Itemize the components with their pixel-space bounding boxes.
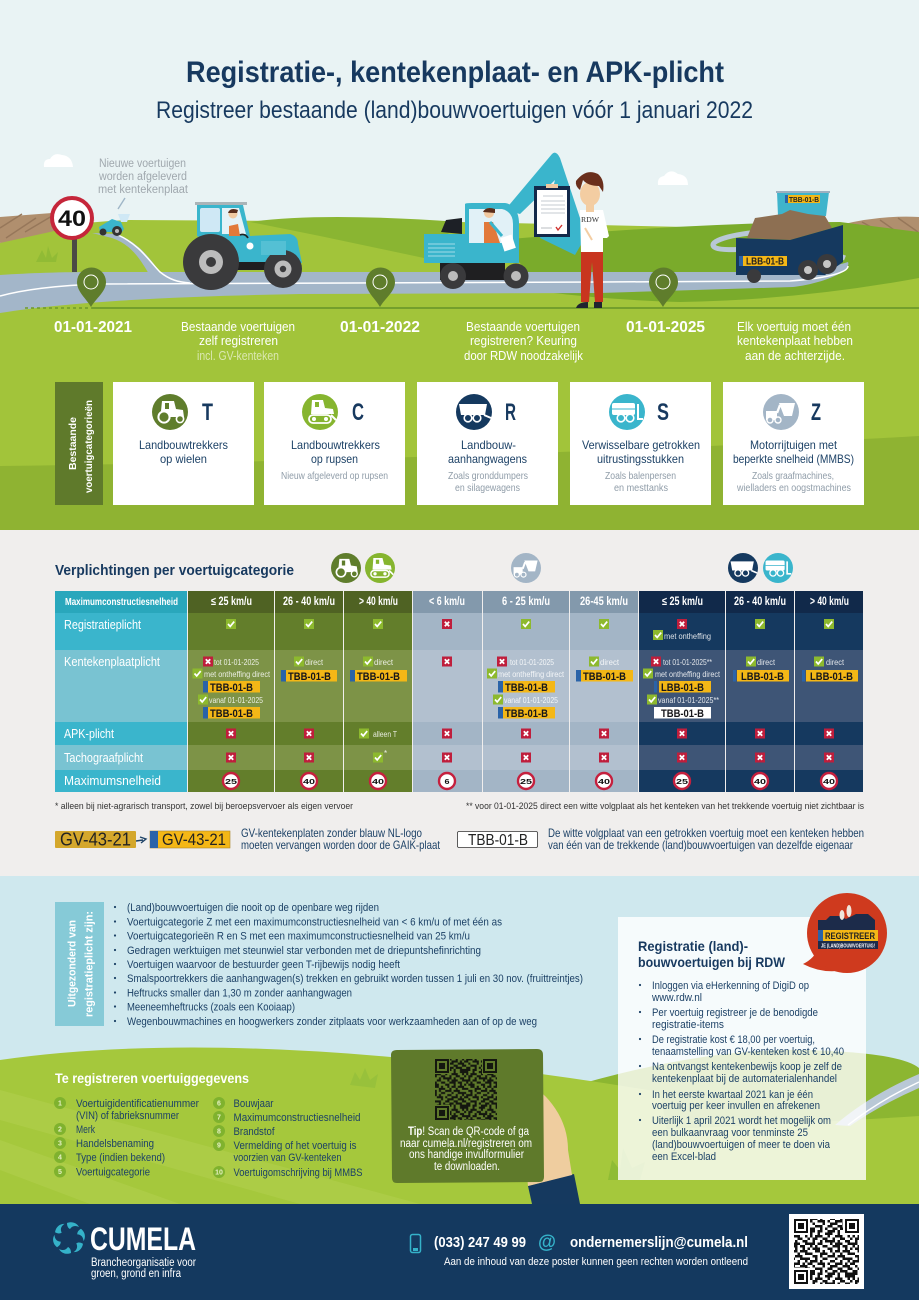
- list: RDW steps: In het eerste kwartaal 2021 kan je één: [652, 1089, 813, 1101]
- panel: category R: R: [505, 399, 516, 426]
- note new vehicles: met kentekenplaat: [98, 184, 189, 196]
- panel: category C: [264, 382, 405, 505]
- panel: category Z: beperkte snelheid (MMBS): [733, 452, 854, 466]
- panel: category Z: [723, 382, 864, 505]
- table: column Z 6-25 km/u: 6 - 25 km/u: [502, 596, 550, 608]
- table: column T/C 26-40 km/u: TBB-01-B: [288, 671, 331, 683]
- panel: exempted label: Uitgezonderd van: [66, 920, 78, 1007]
- text: white plate: [548, 826, 864, 852]
- table: column R/S 26-40 km/u: direct: [757, 658, 776, 667]
- footnote right: ** voor 01-01-2025 direct een witte volgplaat als het kenteken van het trekkende voertuig niet zichtbaar is: [466, 801, 864, 812]
- pin 2021: [77, 268, 106, 307]
- timeline line: [25, 307, 919, 309]
- table: column R/S up to 25 km/u: 25: [676, 777, 688, 786]
- text: GV plates: moeten vervangen worden door de GAIK-plaat: [241, 838, 441, 852]
- panel: category T: op wielen: [160, 452, 207, 466]
- panel: exempted label: [55, 902, 104, 1026]
- text: GV plates: GV-kentekenplaten zonder blauw NL-logo: [241, 826, 422, 840]
- timeline texts: [54, 319, 853, 363]
- table: column Z 6-25 km/u: [483, 591, 569, 792]
- tractor: [183, 202, 302, 290]
- subtitle: Registreer bestaande (land)bouwvoertuigen vóór 1 januari 2022: [156, 97, 753, 124]
- panel: category S: uitrustingsstukken: [597, 452, 684, 466]
- description 2021: incl. GV-kenteken: [197, 348, 279, 363]
- table: column R/S above 40 km/u: 40: [823, 777, 835, 786]
- table: column R/S up to 25 km/u: TBB-01-B: [661, 708, 704, 720]
- table: column T/C up to 25 km/u: TBB-01-B: [210, 682, 253, 694]
- list: exempted vehicles: Smalspoortrekkers die aanhangwagen(s) trekken en gebruikt worden tussen 1 juli en 30 nov. (fruittreintjes): [127, 973, 583, 985]
- table: column R/S up to 25 km/u: vanaf 01-01-2025**: [658, 696, 719, 705]
- description 2022: door RDW noodzakelijk: [464, 348, 583, 363]
- small tractor: [99, 214, 130, 236]
- heading: RDW: [638, 938, 786, 970]
- background: lower grass band: [0, 436, 919, 530]
- table: column R/S above 40 km/u: direct: [826, 658, 845, 667]
- text: white plate: van één van de trekkende (land)bouwvoertuigen van dezelfde eigenaar: [548, 838, 853, 852]
- table: column Z 6-25 km/u: TBB-01-B: [505, 708, 548, 720]
- table: column Z below 6 km/u: [413, 591, 482, 792]
- right brown field: [840, 217, 919, 237]
- table: column T/C above 40 km/u: *: [384, 749, 387, 758]
- text: tip: [400, 1126, 532, 1173]
- description 2021: [181, 319, 295, 363]
- text: tip: ons handige invulformulier: [409, 1149, 524, 1161]
- table: column Z 6-25 km/u: met ontheffing direct: [498, 670, 565, 679]
- table: column T/C above 40 km/u: 40: [372, 777, 384, 786]
- panel: category R: [417, 382, 558, 505]
- plate: white follow plate: TBB-01-B: [468, 832, 528, 849]
- table: column T/C up to 25 km/u: [188, 591, 274, 792]
- list: vehicle data: Voertuigidentificatienummer: [76, 1098, 199, 1110]
- list: vehicle data: 1: [58, 1100, 62, 1108]
- background: grass section: [0, 220, 919, 530]
- table: column T/C above 40 km/u: [344, 591, 412, 792]
- description 2025: aan de achterzijde.: [745, 348, 845, 363]
- list: vehicle data: 10: [215, 1170, 223, 1176]
- panel: category T: Landbouwtrekkers: [139, 438, 228, 452]
- badge: registreer: REGISTREER: [825, 931, 875, 941]
- plate: old GV plate: GV-43-21: [60, 830, 131, 850]
- table: row labels: [55, 591, 187, 792]
- email: ondernemerslijn@cumela.nl: [570, 1234, 748, 1251]
- table: column R/S up to 25 km/u: LBB-01-B: [661, 682, 704, 694]
- date 2025: 01-01-2025: [626, 319, 705, 336]
- list: vehicle data: 2: [58, 1126, 62, 1134]
- list: exempted vehicles: Voertuigcategorieën R en S met een maximumconstructiesnelheid van 25 km/u: [127, 930, 470, 942]
- sign 40: 40: [58, 206, 86, 231]
- list: RDW steps: [639, 980, 844, 1163]
- list: exempted vehicles: (Land)bouwvoertuigen die nooit op de openbare weg rijden: [127, 902, 379, 914]
- logo wordmark: CUMELA: [90, 1221, 196, 1257]
- panel: category S: [570, 382, 711, 505]
- table: column Z 26-45 km/u: 26-45 km/u: [580, 596, 628, 608]
- logo tagline: Brancheorganisatie voor: [91, 1257, 196, 1269]
- list: exempted vehicles: Meeneemheftrucks (zoals een Kooiaap): [127, 1002, 295, 1014]
- panel: vehicle categories label: [55, 382, 103, 505]
- table: column Z 26-45 km/u: direct: [600, 658, 620, 667]
- list: RDW steps: www.rdw.nl: [651, 992, 702, 1004]
- description 2021: zelf registreren: [199, 333, 278, 348]
- cloud right: [658, 171, 688, 185]
- badge: registreer: JE (LAND)BOUWVOERTUIG!: [821, 944, 875, 950]
- table: column R/S up to 25 km/u: [639, 591, 725, 792]
- illustration: hand holding card: [520, 1085, 580, 1204]
- table: column T/C up to 25 km/u: tot 01-01-2025: [214, 658, 259, 667]
- table: column R/S up to 25 km/u: met ontheffing: [664, 632, 711, 641]
- background: obligations section: [0, 530, 919, 876]
- list: RDW steps: een bulkaanvraag voor tenminste 25: [652, 1127, 808, 1139]
- table: column R/S 26-40 km/u: [726, 591, 794, 792]
- card: QR tip: [391, 1049, 544, 1183]
- table: row labels: Registratieplicht: [64, 617, 141, 632]
- table: column R/S above 40 km/u: LBB-01-B: [810, 671, 853, 683]
- list: RDW steps: Na ontvangst kentekenbewijs koop je zelf de: [652, 1061, 842, 1073]
- list: vehicle data: Maximumconstructiesnelheid: [234, 1112, 360, 1124]
- list: RDW steps: een Excel-blad: [652, 1151, 716, 1163]
- text: GV plates: [241, 826, 441, 852]
- list: vehicle data: Brandstof: [234, 1126, 275, 1138]
- plate: new GV plate: GV-43-21: [162, 831, 226, 849]
- table: column R/S above 40 km/u: > 40 km/u: [810, 596, 849, 608]
- list: RDW steps: tenaamstelling van GV-kenteken kost € 10,40: [652, 1046, 844, 1058]
- description 2022: Bestaande voertuigen: [466, 319, 580, 334]
- date 2021: 01-01-2021: [54, 319, 132, 336]
- description 2025: [737, 319, 853, 363]
- list: RDW steps: voertuig per keer invullen en afrekenen: [652, 1100, 820, 1112]
- logo tagline: [91, 1257, 196, 1280]
- obligations table: [55, 591, 863, 792]
- background: sky: [0, 0, 919, 300]
- list: vehicle data: voorzien van GV-kenteken: [234, 1152, 342, 1164]
- panel: category Z: wielladers en oogstmachines: [736, 482, 851, 494]
- table: row labels: Tachograafplicht: [64, 750, 143, 765]
- description 2025: kentekenplaat hebben: [737, 333, 853, 348]
- panel: category R: Landbouw-: [461, 438, 516, 452]
- dark green hill right: [500, 222, 919, 302]
- panel: category C: Landbouwtrekkers: [291, 438, 380, 452]
- table: column T/C above 40 km/u: > 40 km/u: [359, 596, 398, 608]
- table: row labels: Kentekenplaatplicht: [64, 654, 160, 669]
- table: row labels: Maximumconstructiesnelheid: [65, 597, 178, 608]
- list: vehicle data: [54, 1097, 362, 1179]
- table: column Z 6-25 km/u: tot 01-01-2025: [510, 658, 554, 667]
- left brown field: [0, 213, 95, 243]
- list: vehicle data: 8: [217, 1128, 221, 1136]
- description 2022: registreren? Keuring: [470, 333, 577, 348]
- table: column R/S 26-40 km/u: 26 - 40 km/u: [734, 596, 786, 608]
- panel: category Z: Motorrijtuigen met: [750, 438, 838, 452]
- footnote left: * alleen bij niet-agrarisch transport, zowel bij beroepsvervoer als eigen vervoer: [55, 801, 353, 812]
- grass tuft: [36, 246, 58, 262]
- badge: registreer: [803, 893, 887, 973]
- list: exempted vehicles: Heftrucks smaller dan 1,30 m zonder aanhangwagen: [127, 988, 352, 1000]
- panel: category S: en mesttanks: [614, 482, 668, 494]
- icons above table: [331, 553, 793, 583]
- list: exempted vehicles: Wegenbouwmachines en hoogwerkers zonder zitplaats voor werkzaamheden aan of op de weg: [127, 1016, 537, 1028]
- arrow: old to new plate: [136, 837, 146, 843]
- disclaimer: Aan de inhoud van deze poster kunnen geen rechten worden ontleend: [444, 1256, 748, 1268]
- table: column Z 26-45 km/u: 40: [598, 777, 610, 786]
- list: RDW steps: Per voertuig registreer je de benodigde: [652, 1007, 818, 1019]
- table: column T/C 26-40 km/u: 26 - 40 km/u: [283, 596, 335, 608]
- heading: RDW: bouwvoertuigen bij RDW: [638, 954, 786, 970]
- table: column T/C up to 25 km/u: TBB-01-B: [210, 708, 253, 720]
- table: column T/C above 40 km/u: TBB-01-B: [357, 671, 400, 683]
- logo tagline: groen, grond en infra: [91, 1268, 181, 1280]
- list: exempted vehicles: Voertuigen waarvoor de bestuurder geen T-rijbewijs nodig heeft: [127, 959, 400, 971]
- table: column T/C 26-40 km/u: 40: [303, 777, 315, 786]
- table: column R/S up to 25 km/u: met ontheffing direct: [655, 670, 721, 679]
- cloud left: [44, 154, 73, 167]
- title: Registratie-, kentekenplaat- en APK-plicht: [186, 56, 724, 89]
- list: exempted vehicles: [114, 902, 583, 1028]
- table: column R/S above 40 km/u: [795, 591, 863, 792]
- text: tip: te downloaden.: [434, 1161, 500, 1173]
- excavator: [424, 153, 586, 289]
- RDW inspector: [576, 172, 609, 308]
- QR code on card: [435, 1059, 497, 1120]
- panel: vehicle categories label: voertuigcategorieën: [83, 400, 95, 493]
- phone number: (033) 247 49 99: [434, 1234, 526, 1251]
- description 2025: Elk voertuig moet één: [737, 319, 851, 334]
- list: vehicle data: 4: [58, 1154, 62, 1162]
- list: vehicle data: 9: [217, 1142, 221, 1150]
- list: vehicle data: 6: [217, 1100, 221, 1108]
- panel: category R: en silagewagens: [455, 482, 520, 494]
- note new vehicles: Nieuwe voertuigen: [99, 158, 186, 170]
- list: exempted vehicles: Gedragen werktuigen met steunwiel star verbonden met de driepuntshefinrichting: [127, 945, 481, 957]
- QR code footer: [789, 1214, 864, 1289]
- pin 2022: [366, 268, 395, 307]
- list: vehicle data: Handelsbenaming: [76, 1138, 154, 1150]
- list: vehicle data: Merk: [76, 1124, 95, 1136]
- panel: category C: Nieuw afgeleverd op rupsen: [281, 470, 388, 482]
- panel: category C: op rupsen: [311, 452, 358, 466]
- list: RDW steps: registratie-items: [652, 1019, 724, 1031]
- table: column R/S 26-40 km/u: 40: [754, 777, 766, 786]
- panel: category R: aanhangwagens: [448, 452, 527, 466]
- text: tip: naar cumela.nl/registreren om: [400, 1138, 532, 1150]
- trailer: LBB-01-B: [746, 256, 784, 268]
- table: column T/C 26-40 km/u: direct: [305, 658, 324, 667]
- table: column Z 26-45 km/u: [570, 591, 638, 792]
- note new vehicles: [98, 158, 189, 209]
- list: vehicle data: Bouwjaar: [234, 1098, 274, 1110]
- list: exempted vehicles: Voertuigcategorie Z met een maximumconstructiesnelheid van < 6 km/u of met één as: [127, 916, 502, 928]
- table: column T/C up to 25 km/u: 25: [225, 777, 237, 786]
- panel: category C: C: [352, 399, 364, 426]
- table: column Z below 6 km/u: 6: [444, 777, 450, 786]
- panel: RDW registration: [618, 917, 866, 1180]
- trailer: [736, 191, 843, 283]
- table: row labels: Maximumsnelheid: [64, 773, 161, 788]
- list: RDW steps: Inloggen via eHerkenning of DigiD op: [652, 980, 809, 992]
- background: exemption section: [0, 876, 919, 1204]
- panel: category R: Zoals gronddumpers: [448, 470, 528, 482]
- table: column R/S up to 25 km/u: tot 01-01-2025**: [663, 658, 712, 667]
- timeline illustration: [0, 153, 919, 313]
- heading: RDW: Registratie (land)-: [638, 938, 748, 954]
- description 2022: [464, 319, 583, 363]
- clipboard: [534, 184, 570, 237]
- table: column T/C above 40 km/u: alleen T: [373, 730, 397, 739]
- pin 2025: [649, 268, 678, 307]
- table: column Z 6-25 km/u: TBB-01-B: [505, 682, 548, 694]
- dark green hill mid: [250, 217, 460, 258]
- list: RDW steps: Uiterlijk 1 april 2021 wordt het mogelijk om: [652, 1115, 831, 1127]
- table: row labels: APK-plicht: [64, 726, 114, 741]
- list: RDW steps: De registratie kost € 18,00 per voertuig,: [652, 1034, 815, 1046]
- heading: vehicle data: Te registreren voertuiggegevens: [55, 1070, 249, 1086]
- list: vehicle data: 7: [217, 1114, 221, 1122]
- icon: at sign: @: [538, 1232, 556, 1253]
- list: RDW steps: kentekenplaat bij de automaterialenhandel: [652, 1073, 837, 1085]
- table: column Z 6-25 km/u: 25: [520, 777, 532, 786]
- table: column T/C 26-40 km/u: [275, 591, 343, 792]
- background: lower hills: [0, 1048, 919, 1204]
- date 2022: 01-01-2022: [340, 319, 420, 336]
- text: tip: Tip! Scan de QR-code of ga: [408, 1126, 530, 1138]
- list: vehicle data: Type (indien bekend): [76, 1152, 165, 1164]
- panel: exempted label: registratieplicht zijn:: [84, 911, 96, 1017]
- panel: vehicle categories label: Bestaande: [67, 417, 79, 470]
- table: column T/C up to 25 km/u: vanaf 01-01-2025: [209, 696, 263, 705]
- panel: category Z: Zoals graafmachines,: [752, 470, 834, 482]
- heading: obligations: Verplichtingen per voertuigcategorie: [55, 562, 294, 579]
- table: column Z below 6 km/u: < 6 km/u: [429, 596, 465, 608]
- list: RDW steps: (land)bouwvoertuigen of meer te doen via: [652, 1139, 831, 1151]
- panel: category T: T: [202, 399, 213, 426]
- table: column Z 26-45 km/u: TBB-01-B: [583, 671, 626, 683]
- panel: category S: Verwisselbare getrokken: [582, 438, 700, 452]
- list: vehicle data: 3: [58, 1140, 62, 1148]
- table: column T/C up to 25 km/u: ≤ 25 km/u: [211, 596, 252, 608]
- sign 40: [52, 198, 92, 272]
- road: [0, 232, 848, 313]
- panel: category S: S: [657, 399, 669, 426]
- list: vehicle data: Vermelding of het voertuig is: [234, 1140, 357, 1152]
- icon: phone: [410, 1234, 420, 1252]
- panel: category T: [113, 382, 254, 505]
- table: column R/S 26-40 km/u: LBB-01-B: [741, 671, 784, 683]
- RDW inspector: RDW: [581, 215, 600, 224]
- list: vehicle data: Voertuigcategorie: [76, 1166, 150, 1178]
- table: column T/C above 40 km/u: direct: [374, 658, 394, 667]
- description 2021: Bestaande voertuigen: [181, 319, 295, 334]
- table: column Z 6-25 km/u: vanaf 01-01-2025: [504, 696, 558, 705]
- panel: category Z: Z: [811, 399, 821, 426]
- footer: [0, 1204, 919, 1300]
- list: vehicle data: 5: [58, 1169, 62, 1176]
- table: column T/C up to 25 km/u: met ontheffing direct: [204, 670, 271, 679]
- table: column R/S up to 25 km/u: ≤ 25 km/u: [662, 596, 703, 608]
- list: vehicle data: Voertuigomschrijving bij MMBS: [234, 1167, 362, 1179]
- trailer: TBB-01-B: [789, 197, 819, 204]
- note new vehicles: worden afgeleverd: [98, 171, 187, 183]
- panel: category S: Zoals balenpersen: [605, 470, 676, 482]
- logo icon: [50, 1221, 88, 1255]
- list: vehicle data: (VIN) of fabrieksnummer: [76, 1110, 179, 1122]
